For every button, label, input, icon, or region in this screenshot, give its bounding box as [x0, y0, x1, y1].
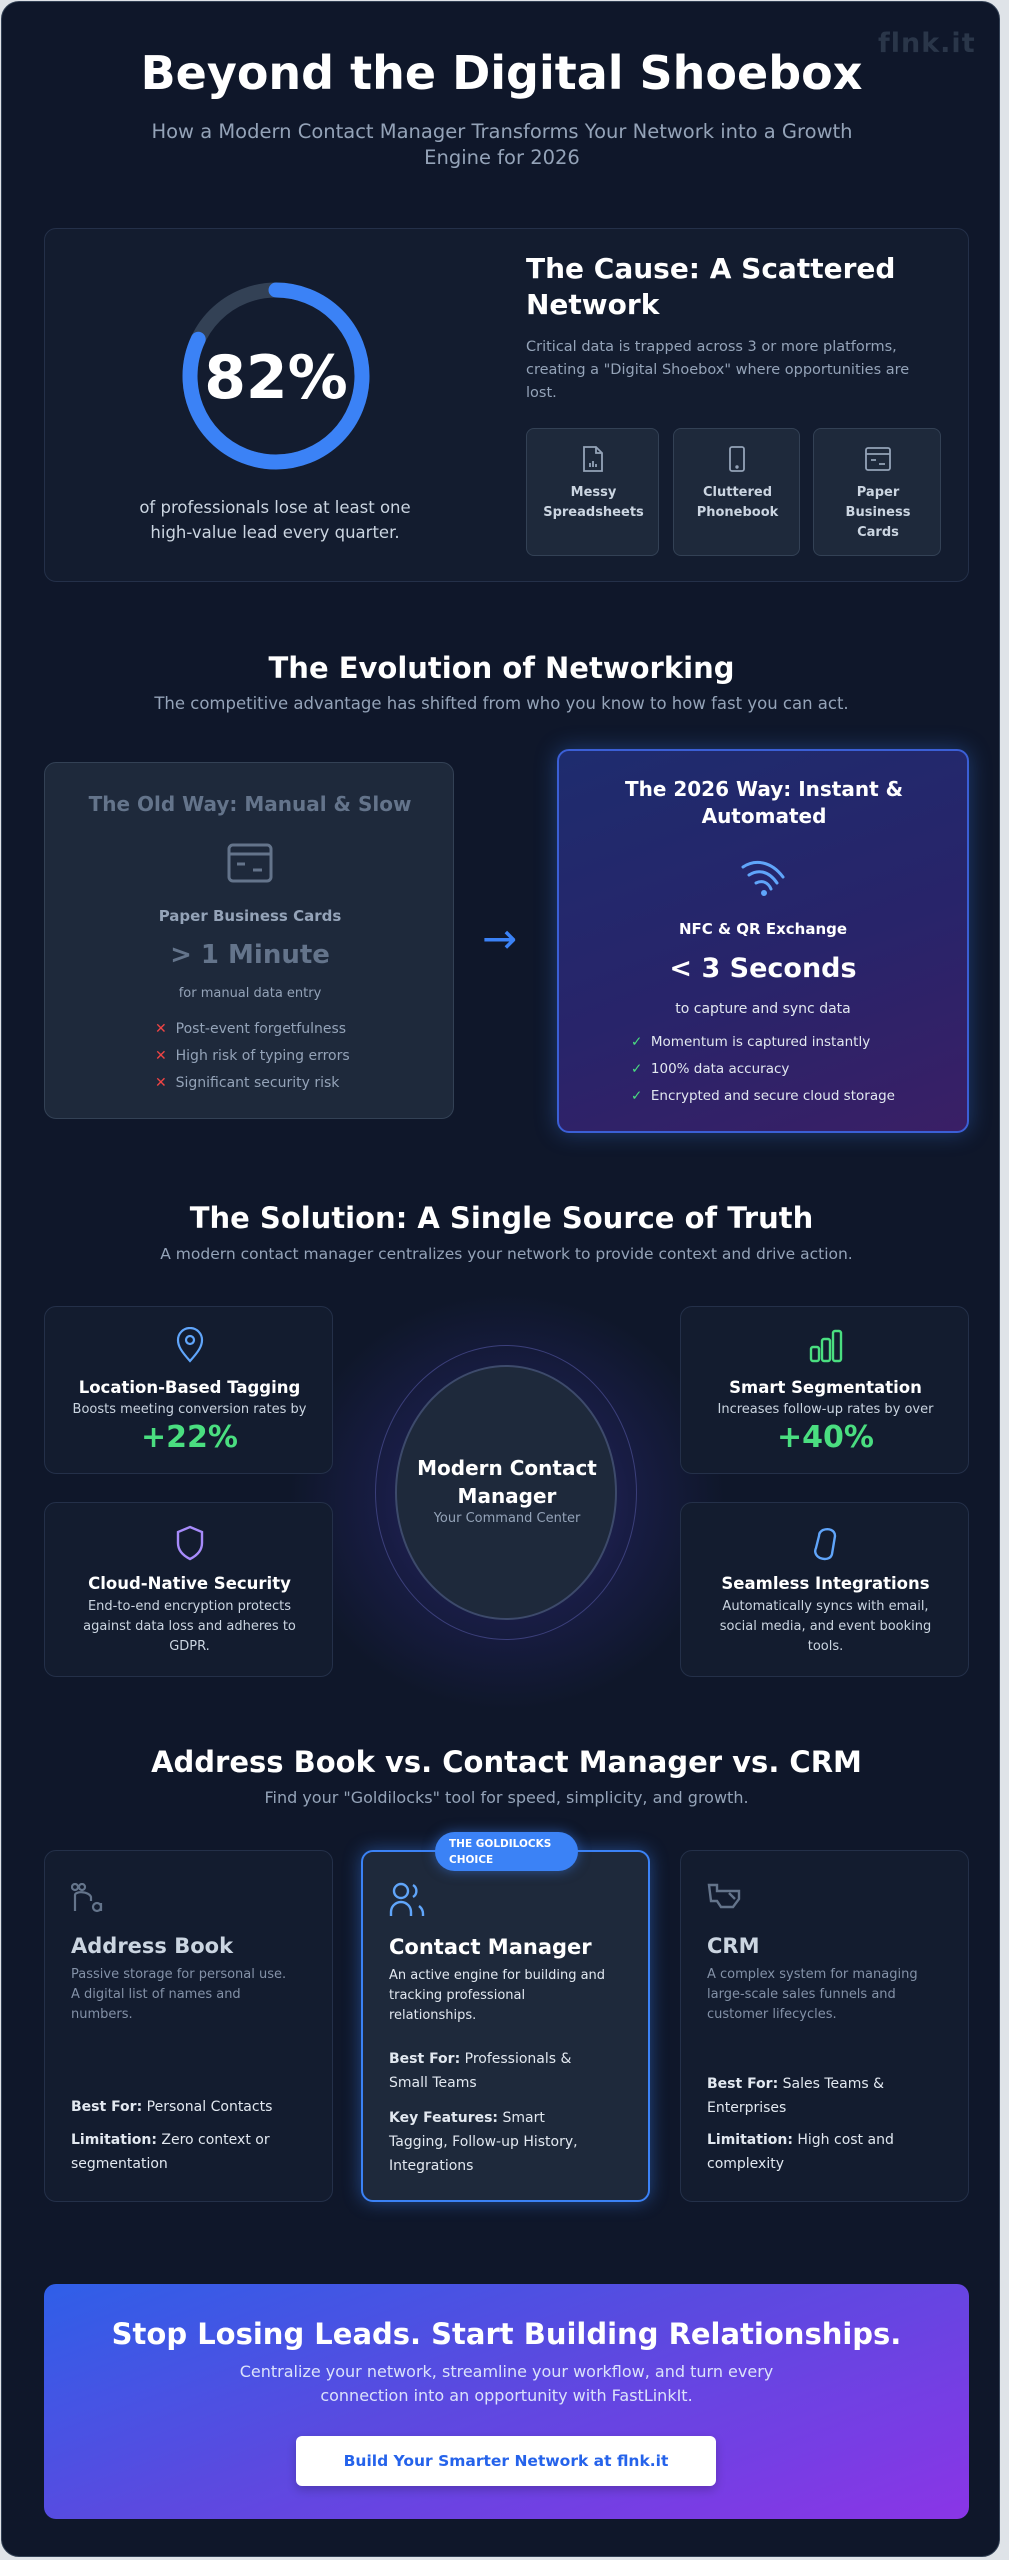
icon: shield — [176, 1526, 204, 1560]
list: old way drawbacks — [155, 1021, 350, 1091]
box: paper business cards — [813, 428, 941, 556]
panel: old way: The Old Way: Manual & Slow — [89, 792, 411, 816]
icon: users — [390, 1882, 424, 1916]
icon: spreadsheet file — [583, 446, 603, 472]
card: crm: Best For: Sales Teams & Enterprises — [707, 2076, 884, 2116]
card: location tagging — [44, 1306, 333, 1474]
heading: evolution: The Evolution of Networking — [269, 651, 734, 685]
panel: 2026 way — [557, 749, 969, 1133]
card: crm — [680, 1850, 969, 2202]
arrow: → — [482, 914, 517, 963]
list: old way drawbacks: ✕ Significant security risk — [155, 1075, 339, 1091]
panel: 2026 way: < 3 Seconds — [669, 953, 857, 984]
box: spreadsheets: Messy Spreadsheets — [543, 485, 644, 520]
button — [296, 2436, 716, 2486]
donut chart 82%: 82% — [204, 343, 348, 413]
box: phonebook: Cluttered Phonebook — [697, 485, 778, 520]
list: old way drawbacks: ✕ High risk of typing errors — [155, 1048, 350, 1064]
card: integrations: Automatically syncs with email, social media, and event booking tools. — [720, 1599, 931, 1654]
panel: call to action: Centralize your network, streamline your workflow, and turn every connection into an opportunity with FastLinkIt. — [240, 2362, 773, 2405]
card: address book: Passive storage for personal use. A digital list of names and numbers. — [71, 1967, 286, 2022]
badge: goldilocks choice: CHOICE — [449, 1854, 493, 1866]
list: new way benefits — [631, 1034, 895, 1104]
card: address book: Address Book — [71, 1934, 233, 1958]
donut chart 82% — [182, 282, 370, 470]
icon: map pin — [176, 1327, 204, 1362]
panel: 2026 way: to capture and sync data — [675, 1001, 851, 1017]
card: smart segmentation: Smart Segmentation — [729, 1378, 922, 1397]
card: integrations: Seamless Integrations — [721, 1574, 930, 1593]
card: smart segmentation: +40% — [777, 1420, 874, 1455]
card: integrations — [680, 1502, 969, 1677]
card: crm: A complex system for managing large-scale sales funnels and customer lifecycles. — [707, 1967, 918, 2022]
donut caption: of professionals lose at least one high-value lead every quarter. — [139, 498, 411, 542]
icon: bar chart — [810, 1330, 842, 1362]
icon: nfc waves — [741, 860, 785, 896]
panel: old way — [44, 762, 454, 1119]
box: phonebook — [673, 428, 800, 556]
heading: solution: The Solution: A Single Source of Truth — [190, 1201, 813, 1235]
panel: the problem — [44, 228, 969, 582]
card: location tagging: +22% — [141, 1420, 238, 1455]
card: contact manager: Contact Manager — [389, 1935, 592, 1959]
card: location tagging: Boosts meeting conversion rates by — [73, 1402, 306, 1417]
hub: modern contact manager: Manager — [458, 1484, 556, 1508]
card: contact manager: An active engine for building and tracking professional relationships. — [389, 1968, 605, 2023]
subtitle: How a Modern Contact Manager Transforms Your Network into a Growth Engine for 2026 — [151, 120, 853, 169]
card: contact manager: Best For: Professionals & Small Teams — [389, 2051, 571, 2091]
icon: business card — [228, 844, 272, 882]
panel: 2026 way: The 2026 Way: Instant & Automated — [625, 777, 903, 828]
subtitle: comparison: Find your "Goldilocks" tool for speed, simplicity, and growth. — [264, 1788, 749, 1807]
badge: goldilocks choice — [435, 1832, 578, 1871]
cause description: Critical data is trapped across 3 or more platforms, creating a "Digital Shoebox" where opportunities are lost. — [526, 339, 909, 401]
icon: crm funnel — [708, 1884, 740, 1908]
card: security: Cloud-Native Security — [88, 1574, 291, 1593]
hub: modern contact manager — [375, 1345, 637, 1640]
list: new way benefits: ✓ 100% data accuracy — [631, 1061, 789, 1077]
title: Beyond the Digital Shoebox — [141, 46, 862, 100]
badge: goldilocks choice: THE GOLDILOCKS — [449, 1838, 551, 1850]
icon: phone — [729, 446, 745, 472]
panel: old way: Paper Business Cards — [159, 907, 341, 925]
card: crm: Limitation: High cost and complexity — [707, 2132, 894, 2172]
list: new way benefits: ✓ Momentum is captured instantly — [631, 1034, 870, 1050]
list: new way benefits: ✓ Encrypted and secure cloud storage — [631, 1088, 895, 1104]
heading: comparison: Address Book vs. Contact Manager vs. CRM — [151, 1745, 862, 1779]
icon: address book — [71, 1883, 102, 1912]
panel: old way: > 1 Minute — [170, 940, 330, 970]
panel: call to action: Stop Losing Leads. Start Building Relationships. — [112, 2317, 901, 2351]
hub glow — [287, 1292, 727, 1712]
subtitle: evolution: The competitive advantage has shifted from who you know to how fast you can act. — [154, 694, 849, 713]
card: address book — [44, 1850, 333, 2202]
card: contact manager — [361, 1850, 650, 2202]
box: spreadsheets — [526, 428, 659, 556]
panel: old way: for manual data entry — [179, 986, 321, 1001]
card: address book: Best For: Personal Contacts — [71, 2099, 272, 2115]
card: security — [44, 1502, 333, 1677]
card: smart segmentation: Increases follow-up rates by over — [718, 1402, 933, 1417]
panel: call to action — [44, 2284, 969, 2519]
hub: modern contact manager: Modern Contact — [417, 1456, 597, 1480]
watermark: flnk.it — [878, 28, 976, 59]
button: Build Your Smarter Network at flnk.it — [344, 2452, 668, 2470]
card: crm: CRM — [707, 1934, 759, 1958]
list: old way drawbacks: ✕ Post-event forgetfulness — [155, 1021, 346, 1037]
icon: link blob — [814, 1528, 836, 1560]
heading: the cause: The Cause: A Scattered Network — [526, 252, 895, 321]
hub: modern contact manager: Your Command Center — [434, 1511, 580, 1526]
card: smart segmentation — [680, 1306, 969, 1474]
card: contact manager: Key Features: Smart Tagging, Follow-up History, Integrations — [389, 2110, 578, 2174]
panel: 2026 way: NFC & QR Exchange — [679, 920, 847, 938]
card: address book: Limitation: Zero context or segmentation — [71, 2132, 270, 2172]
card: location tagging: Location-Based Tagging — [79, 1378, 300, 1397]
box: paper business cards: Paper Business Cards — [846, 485, 910, 540]
card: security: End-to-end encryption protects against data loss and adheres to GDPR. — [83, 1599, 296, 1654]
icon: card — [865, 447, 891, 471]
subtitle: solution: A modern contact manager centralizes your network to provide context and drive action. — [160, 1245, 853, 1263]
